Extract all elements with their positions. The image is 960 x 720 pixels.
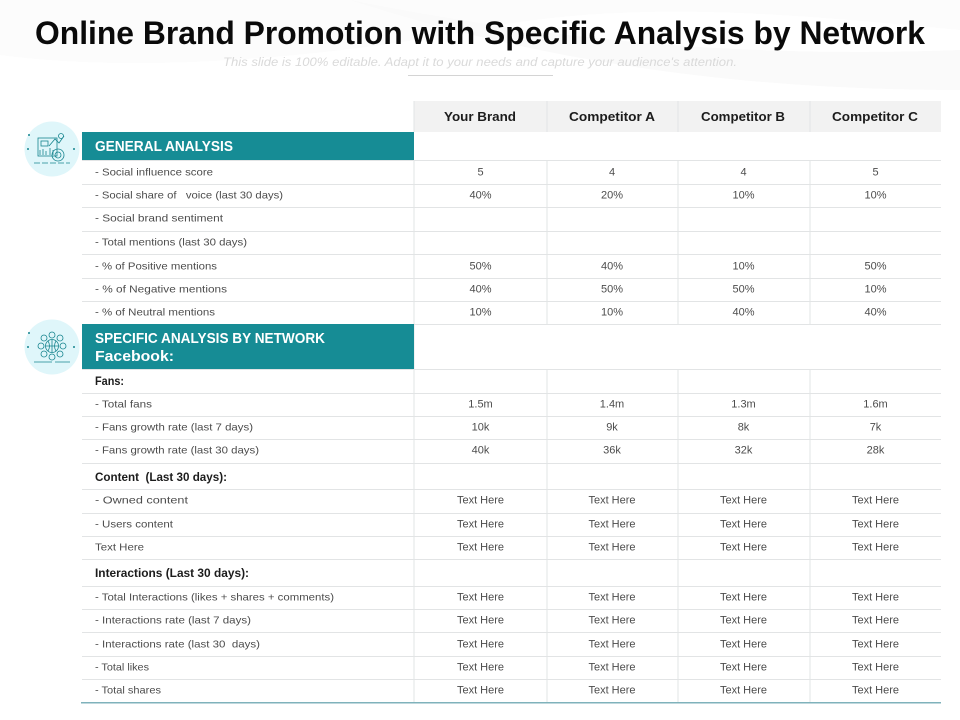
table bottom border	[81, 702, 941, 704]
rows: interactions: Text Here	[852, 684, 899, 696]
rows: interactions: Text Here	[852, 638, 899, 650]
rows: fans: 1.3m	[731, 398, 756, 410]
rows: fans: 36k	[603, 444, 621, 456]
rows: general analysis: - % of Positive mentions	[95, 260, 217, 272]
rows: interactions: Text Here	[852, 662, 899, 674]
rows: interactions: Text Here	[457, 592, 504, 604]
rows: fans: 1.5m	[468, 398, 493, 410]
rows: fans: 8k	[738, 422, 750, 434]
rows: fans: 1.6m	[863, 398, 888, 410]
rows: interactions: Text Here	[852, 614, 899, 626]
rows: general analysis: 5	[872, 166, 879, 178]
rows: content: Text Here	[588, 518, 636, 530]
rows: content: Text Here	[588, 494, 636, 506]
rows: general analysis: 40%	[601, 260, 623, 272]
rows: interactions: Text Here	[457, 638, 504, 650]
rows: interactions: Text Here	[852, 592, 899, 604]
rows: fans: 28k	[867, 444, 885, 456]
section band: specific analysis by network: Facebook:	[95, 349, 174, 365]
table header row: Competitor A	[569, 109, 656, 124]
rows: content: Text Here	[457, 494, 504, 506]
rows: interactions: - Total shares	[95, 684, 161, 696]
rows: general analysis: 20%	[601, 190, 623, 202]
table grid lines	[82, 101, 941, 702]
subtitle: This slide is 100% editable. Adapt it to your needs and capture your audience's attention.	[223, 55, 737, 69]
rows: content: Text Here	[852, 542, 899, 554]
rows: content: Text Here	[95, 542, 144, 554]
rows: interactions	[95, 568, 899, 696]
rows: general analysis: - Social influence score	[95, 166, 213, 178]
rows: interactions: Interactions (Last 30 days):	[95, 568, 249, 580]
rows: fans: - Fans growth rate (last 7 days)	[95, 422, 253, 434]
rows: content: Text Here	[720, 518, 767, 530]
rows: interactions: Text Here	[720, 592, 767, 604]
rows: general analysis: 50%	[469, 260, 492, 272]
rows: fans: 7k	[870, 422, 882, 434]
rows: content	[95, 472, 899, 554]
rows: interactions: - Total likes	[95, 662, 149, 674]
rows: general analysis: 10%	[732, 190, 755, 202]
rows: general analysis: 10%	[732, 260, 755, 272]
rows: content: Text Here	[457, 542, 504, 554]
rows: general analysis: 4	[609, 166, 615, 178]
rows: fans: 9k	[606, 422, 618, 434]
rows: general analysis: - % of Neutral mentions	[95, 306, 215, 318]
rows: interactions: Text Here	[588, 684, 636, 696]
rows: content: - Owned content	[95, 494, 188, 506]
rows: general analysis: 50%	[732, 284, 755, 296]
section band: general analysis: GENERAL ANALYSIS	[95, 139, 233, 155]
section band: specific analysis by network: SPECIFIC ANALYSIS BY NETWORK	[95, 331, 325, 347]
rows: general analysis: 10%	[864, 284, 887, 296]
rows: content: Text Here	[852, 518, 899, 530]
rows: content: Text Here	[720, 494, 767, 506]
section band: general analysis	[82, 132, 414, 160]
rows: fans: Fans:	[95, 376, 124, 388]
rows: general analysis: - Total mentions (last 30 days)	[95, 236, 247, 248]
rows: general analysis: - Social share of voice (last 30 days)	[95, 190, 283, 202]
rows: general analysis: - % of Negative mentions	[95, 284, 227, 296]
section band: specific analysis by network	[82, 324, 414, 369]
rows: fans: 40k	[472, 444, 490, 456]
rows: content: Content (Last 30 days):	[95, 472, 227, 484]
rows: fans: - Fans growth rate (last 30 days)	[95, 444, 259, 456]
rows: fans: 1.4m	[600, 398, 624, 410]
rows: interactions: Text Here	[588, 662, 636, 674]
rows: general analysis: 50%	[864, 260, 887, 272]
rows: fans	[95, 376, 888, 456]
rows: general analysis: 40%	[864, 306, 887, 318]
rows: interactions: - Interactions rate (last 7 days)	[95, 614, 251, 626]
rows: interactions: - Total Interactions (likes + shares + comments)	[95, 592, 334, 604]
rows: fans: - Total fans	[95, 398, 152, 410]
rows: general analysis: 10%	[864, 190, 887, 202]
rows: interactions: - Interactions rate (last 30 days)	[95, 638, 260, 650]
rows: general analysis: - Social brand sentiment	[95, 212, 223, 224]
title: Online Brand Promotion with Specific Analysis by Network	[35, 15, 925, 51]
rows: interactions: Text Here	[457, 684, 504, 696]
rows: interactions: Text Here	[588, 614, 636, 626]
rows: interactions: Text Here	[720, 614, 767, 626]
table header row: Competitor C	[832, 109, 919, 124]
rows: general analysis: 10%	[469, 306, 492, 318]
table header row: Your Brand	[444, 109, 516, 124]
rows: general analysis: 40%	[469, 190, 492, 202]
rows: interactions: Text Here	[720, 638, 767, 650]
table header row: Competitor B	[701, 109, 785, 124]
rows: interactions: Text Here	[457, 662, 504, 674]
rows: general analysis	[95, 166, 887, 318]
rows: fans: 32k	[735, 444, 753, 456]
icon: network globe	[24, 320, 80, 374]
rows: general analysis: 40%	[732, 306, 755, 318]
rows: content: Text Here	[852, 494, 899, 506]
rows: content: - Users content	[95, 518, 173, 530]
table header row	[414, 101, 941, 132]
rows: general analysis: 50%	[601, 284, 623, 296]
rows: interactions: Text Here	[457, 614, 504, 626]
rows: content: Text Here	[720, 542, 767, 554]
rows: interactions: Text Here	[588, 638, 636, 650]
rows: general analysis: 5	[477, 166, 484, 178]
rows: general analysis: 40%	[469, 284, 492, 296]
rows: general analysis: 4	[740, 166, 747, 178]
rows: interactions: Text Here	[720, 662, 767, 674]
icon: analytics chart	[24, 122, 80, 176]
rows: fans: 10k	[472, 422, 490, 434]
rows: content: Text Here	[457, 518, 504, 530]
subtitle underline	[408, 75, 553, 76]
rows: content: Text Here	[588, 542, 636, 554]
rows: interactions: Text Here	[720, 684, 767, 696]
rows: interactions: Text Here	[588, 592, 636, 604]
rows: general analysis: 10%	[601, 306, 623, 318]
